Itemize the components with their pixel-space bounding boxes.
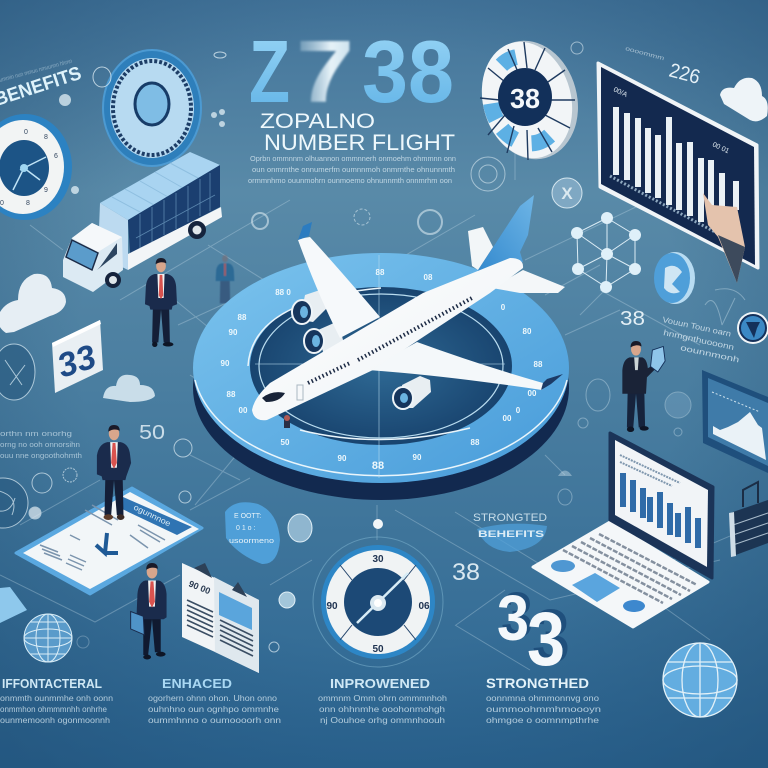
- icon: cloud left: [0, 274, 66, 333]
- lower wing: [367, 342, 543, 390]
- column: informational: IFFONTACTERAL: [2, 676, 102, 691]
- title text: NUMBER FLIGHT: [264, 130, 455, 155]
- gauge dial: 90: [326, 601, 338, 612]
- tablet bar chart top right: 00 01: [711, 141, 730, 155]
- column: strongthed: oummoohmmhmoooyn: [486, 705, 601, 714]
- gauge dial: 30: [372, 554, 384, 565]
- number 38 bottom: 38: [452, 559, 480, 586]
- text: 226 top right: oooommm: [624, 46, 665, 62]
- text: faded strengthened label: STRONGTED: [473, 512, 547, 524]
- disc labels: 88: [372, 460, 384, 472]
- column: enhanced: oummhnno o oumoooorh onn: [148, 716, 281, 725]
- icon: small cloud: [103, 375, 155, 402]
- person: with briefcase: [131, 563, 167, 660]
- text block: left middle caption: ouu nne ongoothohmth: [0, 453, 82, 460]
- column: improwened: ommnm Omm ohrn ommmnhoh: [318, 694, 447, 703]
- icon: left clock dial: 8: [26, 200, 30, 207]
- big number 33: 3: [527, 597, 565, 682]
- column: improwened: INPROWENED: [330, 676, 430, 691]
- column: enhanced: [148, 676, 281, 725]
- disc labels: 88: [471, 438, 480, 447]
- column: strongthed: [486, 675, 601, 725]
- person: standing on document: [97, 425, 131, 520]
- disc labels: 08: [424, 273, 433, 282]
- hand pointing at chart: [703, 193, 745, 283]
- disc labels: 90: [221, 359, 230, 368]
- column: improwened: onn ohhnmhe ooohonmohgh: [319, 705, 445, 714]
- number 50: 50: [139, 422, 165, 444]
- laptop: [533, 433, 713, 627]
- disc labels: 90: [338, 454, 347, 463]
- text: faded strengthened label: BEHEFITS: [478, 529, 544, 539]
- icon: cloud top right: [720, 78, 768, 121]
- column: improwened: nj Oouhoe orhg ommnhoouh: [320, 716, 445, 725]
- icon: dark half circle left: [0, 344, 35, 400]
- small icons beside title: [252, 42, 583, 234]
- chart panel right: [702, 370, 768, 473]
- disc labels: 88 0: [275, 288, 291, 297]
- disc labels: 88: [534, 360, 543, 369]
- person: with tablet: [622, 341, 665, 432]
- title number: 7: [296, 22, 354, 121]
- connector network lines: [0, 150, 768, 670]
- hand sleeve: [718, 235, 745, 283]
- text block: left middle caption: [0, 431, 82, 460]
- disc labels: 88: [238, 313, 247, 322]
- title number: 38: [362, 22, 454, 121]
- disc labels: 0: [516, 406, 521, 415]
- wireframe globe right: [663, 643, 737, 717]
- subtitle text block: oun onmrnthe onnumerfm oumnnmoh onmrnthe ohnunnmth: [252, 165, 455, 174]
- title number: Z: [249, 22, 290, 121]
- column: enhanced: ouhnhno oun ognhpo ommnhe: [148, 705, 280, 714]
- newspaper: 90 00: [187, 579, 212, 596]
- gauge dial: 50: [372, 644, 384, 655]
- gauge dial: 06: [418, 601, 430, 612]
- big number 33: [497, 579, 570, 682]
- column: informational: [0, 676, 113, 725]
- column: informational: ounmemoonh ogonmoonnh: [0, 716, 110, 725]
- text: 226 top right: [624, 46, 702, 89]
- icon: left clock dial: 0: [0, 200, 4, 207]
- top left faint caption lines: ummin nun mmuu nmuunnn hhmn: [0, 59, 73, 84]
- network hex icon: [571, 212, 641, 293]
- column: informational: onmmth ounmmhe onh oonn: [0, 694, 113, 703]
- icon: circle x: X: [561, 184, 573, 203]
- tablet bar chart top right: 00/A: [612, 86, 628, 99]
- top right wheel with number 38: 38: [510, 83, 540, 114]
- text block right: Vouun Toun oarn: [662, 315, 732, 339]
- text: faded strengthened label: [473, 512, 547, 552]
- airplane: [252, 195, 565, 420]
- disc labels: 00: [528, 389, 537, 398]
- icon: triangular shape: [0, 587, 27, 623]
- upper wing: [298, 237, 380, 338]
- disc labels: [221, 268, 543, 472]
- text block right: [662, 315, 740, 364]
- small icons lower left: [0, 439, 279, 652]
- disc labels: 90: [413, 453, 422, 462]
- big number 33: 3: [497, 582, 529, 654]
- column: informational: onmmhon ohmmmnhh onhrhe: [0, 705, 108, 714]
- suitcase: [729, 482, 768, 557]
- document panel with checkmark: ogunnnoe: [132, 503, 173, 529]
- fuselage: [252, 258, 523, 420]
- stabilizer: [492, 270, 565, 293]
- disc labels: 00: [503, 414, 512, 423]
- disc labels: 90: [229, 328, 238, 337]
- faint sketch icons right: [558, 289, 745, 505]
- icon: left clock dial: 6: [54, 153, 58, 160]
- tile: number 33: 33: [53, 338, 101, 386]
- icon: left clock dial: 9: [44, 187, 48, 194]
- text block: left middle caption: orthn nm onorhg: [0, 431, 72, 438]
- gauge dial: [313, 519, 443, 667]
- text block right: hnmgnthuooonn: [663, 328, 735, 352]
- column: strongthed: oonnmna ohmmonnvg ono: [486, 694, 600, 703]
- disc labels: 88: [376, 268, 385, 277]
- small icons upper left: [59, 52, 226, 194]
- big number 33: 3: [532, 594, 570, 679]
- document panel with checkmark: [16, 488, 202, 594]
- disc labels: 50: [281, 438, 290, 447]
- icon: circle x: [552, 178, 582, 208]
- icon: left clock dial: 8: [44, 134, 48, 141]
- engine under lower wing: [393, 376, 431, 409]
- disc labels: 80: [523, 327, 532, 336]
- column: improwened: [318, 676, 447, 725]
- icon: round emblem right: [737, 312, 768, 344]
- big number 33: 3: [501, 579, 533, 651]
- column: strongthed: ohmgoe o oomnmpthrhe: [486, 716, 600, 725]
- disc labels: 00: [239, 406, 248, 415]
- icon: large dial: [103, 50, 201, 166]
- central disc with scale: [193, 253, 569, 500]
- small person under nose: [284, 415, 290, 428]
- tile: number 33: [52, 320, 103, 393]
- person: distant blurred: [216, 255, 234, 303]
- text block: left middle caption: orng no ooh onnorsihn: [0, 442, 80, 449]
- icon: left clock dial: [0, 114, 72, 220]
- column: enhanced: ogorhern ohnn ohon. Uhon onno: [148, 694, 278, 703]
- title text: [260, 110, 455, 155]
- blue callout bubble: 0 1 o :: [236, 525, 256, 532]
- subtitle text block: Oprbn ommnnm olhuannon ommnnerh onmoehm ohmmnn onn: [250, 154, 456, 163]
- column: enhanced: ENHACED: [162, 676, 232, 691]
- icon: delivery truck: [63, 152, 222, 292]
- person: standing by truck: [145, 258, 177, 347]
- top right wheel with number 38: [469, 30, 591, 170]
- disc labels: 0: [501, 303, 506, 312]
- engines behind upper wing: [292, 290, 345, 353]
- column: strongthed: STRONGTHED: [486, 675, 589, 691]
- subtitle text block: ormmnhmo ouunmohrn ounmoemo ohnunnmth onnmrhm oon: [248, 176, 452, 185]
- title number: [249, 22, 454, 121]
- newspaper: [182, 563, 259, 673]
- subtitle text block: [248, 154, 456, 185]
- blue callout bubble: usoormeno: [229, 538, 274, 545]
- icon: left clock dial: 0: [24, 129, 28, 136]
- number 38 right: 38: [620, 308, 645, 330]
- title text: ZOPALNO: [260, 110, 375, 133]
- disc labels: 88: [227, 390, 236, 399]
- blue callout bubble: [225, 502, 280, 564]
- tail: [468, 227, 493, 270]
- icon: wireframe globe left: [24, 614, 72, 662]
- text: 226 top right: 226: [667, 60, 702, 89]
- icon: blue coin: [654, 252, 695, 304]
- bubble icon near centre bottom: [279, 514, 312, 608]
- blue callout bubble: E OOTT:: [234, 513, 261, 520]
- tablet bar chart top right: [598, 63, 758, 268]
- text block right: oounnmonh: [680, 343, 740, 364]
